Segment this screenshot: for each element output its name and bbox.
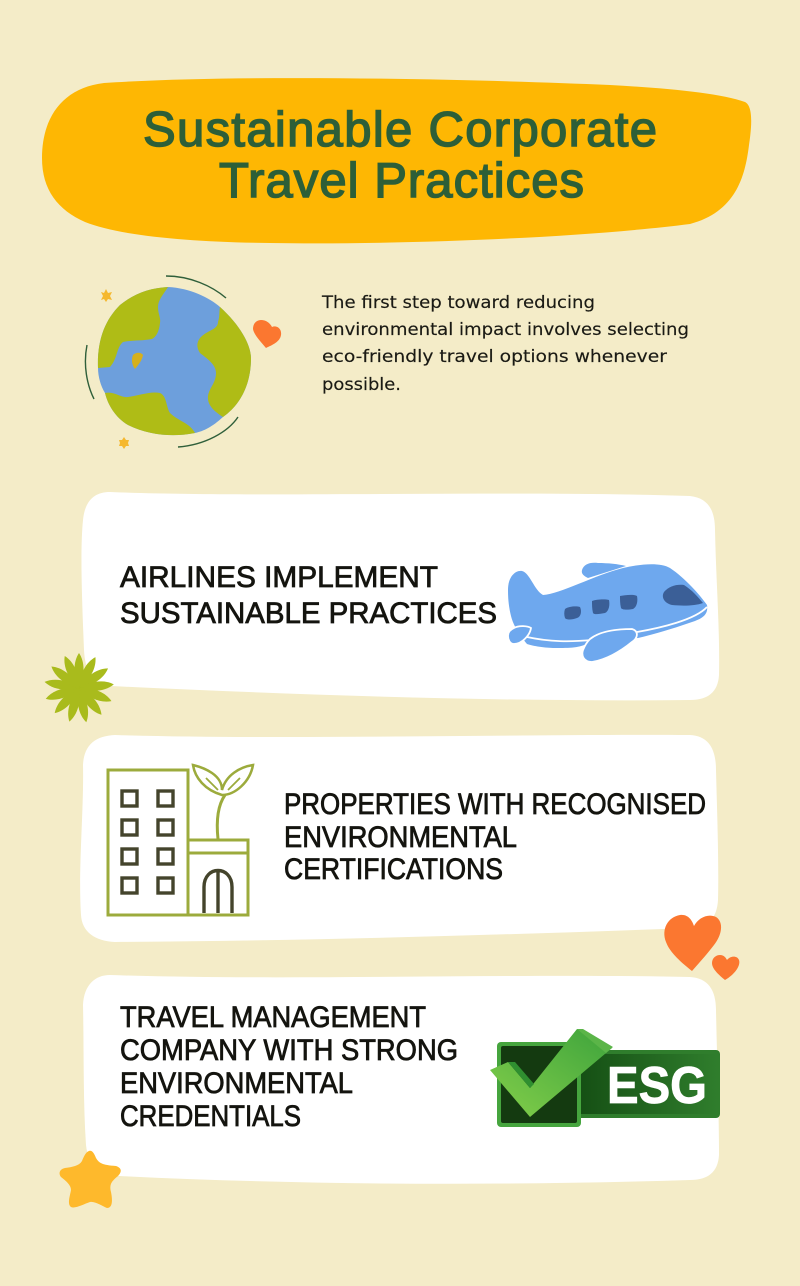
heading: travel management: TRAVEL MANAGEMENT <box>120 1001 426 1034</box>
intro text <box>321 293 689 394</box>
heading: travel management: CREDENTIALS <box>120 1100 301 1133</box>
icon: star <box>60 1151 121 1208</box>
icon: airplane <box>508 563 707 662</box>
heading: properties <box>284 788 706 886</box>
icon: hearts <box>664 915 739 980</box>
icon: ESG check badge <box>490 1029 720 1127</box>
heading: travel management: COMPANY WITH STRONG <box>120 1034 458 1067</box>
intro text: environmental impact involves selecting <box>322 320 689 339</box>
icon: ESG check badge: ESG <box>607 1057 707 1115</box>
heading: airlines: SUSTAINABLE PRACTICES <box>120 597 497 630</box>
title banner <box>42 78 751 243</box>
intro text: The first step toward reducing <box>321 293 595 312</box>
title banner: Sustainable Corporate <box>143 103 657 157</box>
panel: certified properties <box>80 735 718 942</box>
panel: travel management <box>83 975 720 1184</box>
intro text: eco-friendly travel options whenever <box>322 347 667 366</box>
intro text: possible. <box>322 375 401 394</box>
heading: properties: ENVIRONMENTAL <box>284 821 517 854</box>
heading: properties: CERTIFICATIONS <box>284 853 503 886</box>
icon: green building <box>108 765 253 915</box>
icon: globe <box>85 276 281 449</box>
title banner: Travel Practices <box>219 154 584 208</box>
heading: travel management <box>120 1001 458 1133</box>
heading: travel management: ENVIRONMENTAL <box>120 1067 353 1100</box>
panel: airlines <box>81 492 719 700</box>
icon: green burst <box>44 653 114 723</box>
heading: airlines <box>120 561 497 630</box>
heading: properties: PROPERTIES WITH RECOGNISED <box>284 788 706 821</box>
heading: airlines: AIRLINES IMPLEMENT <box>120 561 438 594</box>
